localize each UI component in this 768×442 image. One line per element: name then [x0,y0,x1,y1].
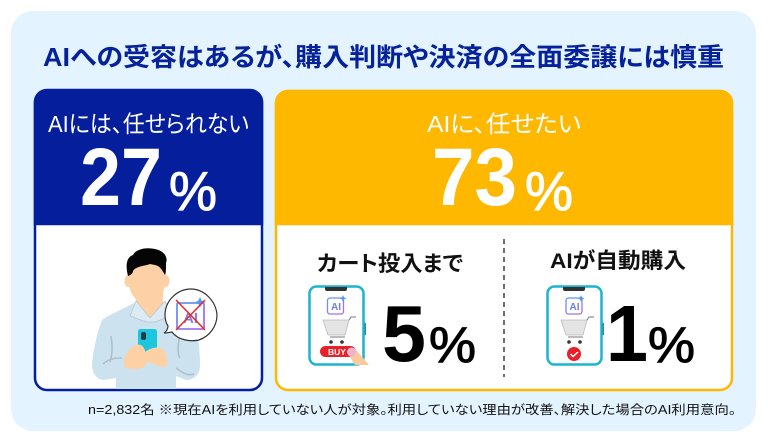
column divider [503,239,505,377]
figure 5%: 5 [382,289,426,378]
phone [138,329,157,362]
neck [136,290,163,318]
panel heading: cannot entrust: AIには、任せられない [48,111,249,137]
icon: phone with cart and buy button: AI [331,302,341,313]
icon: phone with cart and check [548,286,604,364]
finger [347,348,369,365]
icon: phone with cart and check: AI [570,302,580,313]
buy button [320,346,356,357]
icon: phone with cart and buy button [310,286,369,365]
shirt shadows [103,335,194,375]
collar [130,301,171,322]
panel heading: want to entrust: AIに、任せたい [427,111,581,137]
footnote: n=2,832名 ※現在AIを利用していない人が対象。利用していない理由が改善、解決した場合のAI利用意向。 [88,402,736,417]
percent sign: % [525,160,573,222]
percent sign: % [648,317,695,373]
shirt [92,302,200,389]
cart [323,320,349,335]
head [128,252,166,304]
percent sign: % [429,317,476,373]
hands [124,345,146,369]
cart [561,320,587,335]
check badge [567,347,581,361]
figure 1%: 1 [606,289,648,378]
panel: want to entrust AI 73% [276,91,732,390]
hair [127,248,167,276]
label: AI purchases automatically: AIが自動購入 [550,248,686,273]
speech bubble [164,289,217,341]
figure 73%: 73 [432,132,517,223]
panel: cannot entrust AI 27% [35,90,262,390]
AI icon crossed out: AI [183,310,198,327]
percent sign: % [169,160,217,222]
title: AIへの受容はあるが、購入判断や決済の全面委譲には慎重 [43,43,724,72]
illustration: man holding phone [92,248,217,389]
AI icon crossed out [176,297,205,330]
label: up to cart: カート投入まで [317,252,464,276]
figure 27%: 27 [80,132,162,223]
icon: phone with cart and buy button: BUY [328,347,346,357]
